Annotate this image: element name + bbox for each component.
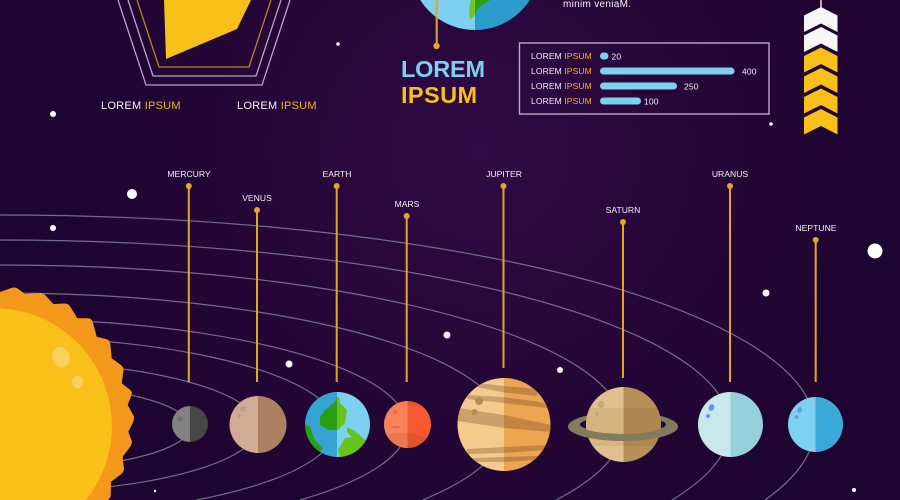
planet: Neptune <box>788 223 843 452</box>
bar chart panel: 250 <box>684 82 699 92</box>
planet: Mercury: MERCURY <box>167 169 211 179</box>
orbits <box>0 215 815 500</box>
big title: IPSUM <box>401 82 477 108</box>
bar chart panel: 20 <box>612 52 621 62</box>
hexagon label right: LOREM IPSUM <box>237 100 317 112</box>
hexagon diagram <box>118 0 290 85</box>
hexagon label left: LOREM IPSUM <box>101 100 181 112</box>
big title <box>401 56 485 108</box>
planet: Mercury <box>167 169 211 442</box>
bar chart panel: 400 <box>742 66 757 76</box>
bar chart panel: 100 <box>644 96 659 106</box>
bar chart panel: LOREM IPSUM <box>531 96 592 106</box>
planet: Uranus: URANUS <box>712 169 748 179</box>
planet: Earth: EARTH <box>323 169 351 179</box>
top earth icon <box>420 0 530 30</box>
big title: LOREM <box>401 56 485 82</box>
planet: Neptune: NEPTUNE <box>795 223 837 233</box>
planet: Earth <box>304 169 371 458</box>
planet: Saturn <box>568 205 678 463</box>
planet: Mars: MARS <box>395 199 420 209</box>
bar chart panel: LOREM IPSUM <box>531 66 592 76</box>
planet: Venus: VENUS <box>242 193 272 203</box>
bar chart panel: LOREM IPSUM <box>531 51 592 61</box>
planet: Saturn: SATURN <box>606 205 640 215</box>
planet: Uranus <box>698 169 763 457</box>
bar chart panel: LOREM IPSUM <box>531 81 592 91</box>
hexagon yellow shape <box>164 0 251 59</box>
top earth pointer <box>433 0 440 49</box>
planet: Venus <box>230 193 286 453</box>
bar chart panel <box>520 43 769 114</box>
chevron stack <box>804 0 838 134</box>
planet: Mars <box>384 199 432 450</box>
planet: Jupiter: JUPITER <box>486 169 522 179</box>
planet: Jupiter <box>457 169 552 472</box>
sun <box>0 287 134 500</box>
